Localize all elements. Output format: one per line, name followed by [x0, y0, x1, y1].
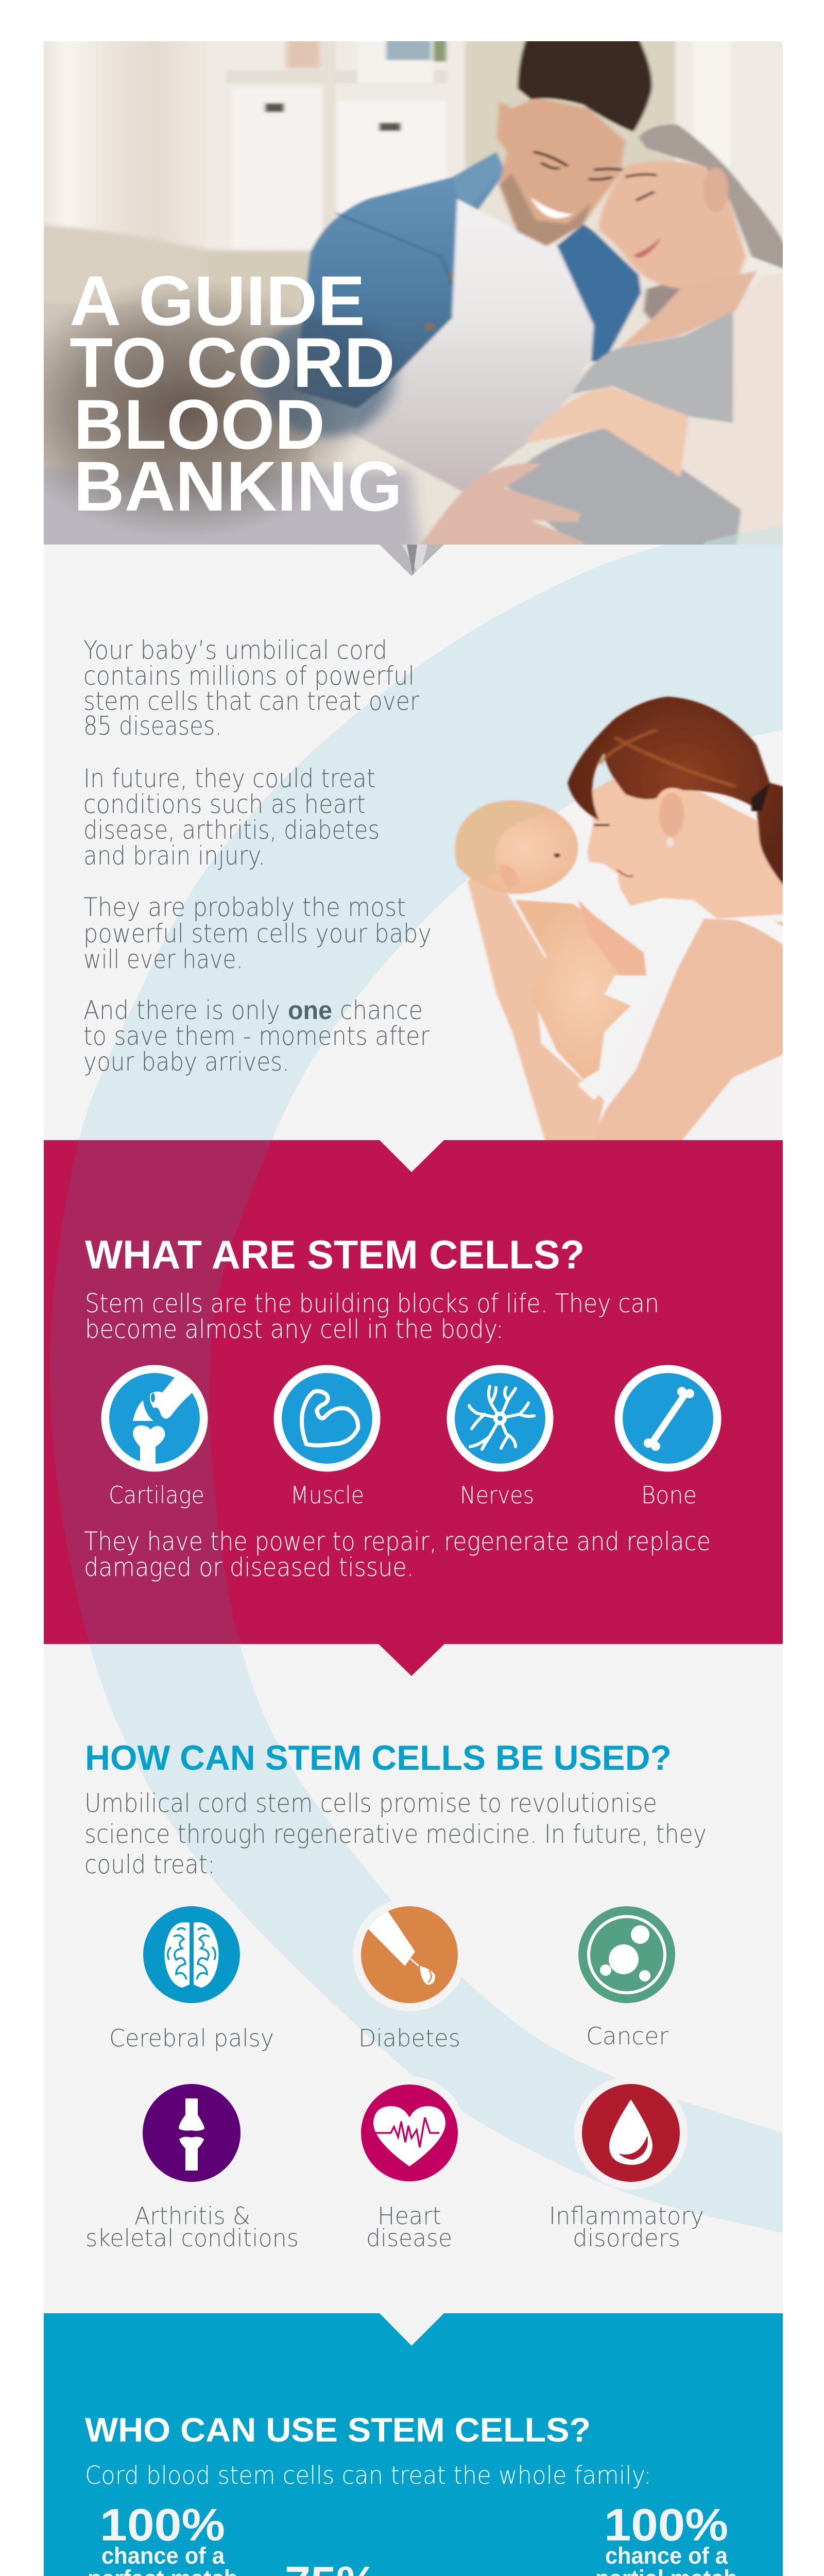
- condition labels: [85, 2022, 704, 2252]
- text: whole family: Cord blood stem cells can treat the whole family:: [85, 2461, 651, 2490]
- text: revolutionise: could treat:: [84, 1850, 215, 1879]
- icon: muscle: [274, 1365, 380, 1471]
- icon labels: [109, 1481, 697, 1509]
- notch into who section: [380, 2313, 444, 2346]
- intro text: disease, arthritis, diabetes: [83, 815, 380, 845]
- intro text: powerful stem cells your baby: [83, 919, 432, 948]
- intro text: stem cells that can treat over: [83, 686, 419, 716]
- condition labels: skeletal conditions: [85, 2224, 299, 2252]
- title: BLOOD: [74, 385, 325, 464]
- intro text: In future, they could treat: [83, 764, 375, 793]
- bar chart: match chances: 100%: [604, 2499, 728, 2550]
- intro text: 85 diseases.: [83, 711, 222, 741]
- intro text: to save them - moments after: [83, 1021, 430, 1051]
- text: revolutionise: [84, 1788, 707, 1879]
- intro text: [83, 635, 432, 1077]
- icon: diabetes pen: [353, 1898, 466, 2011]
- intro text: chance: [340, 995, 423, 1025]
- icon: blood drop: [574, 2076, 688, 2190]
- panel: how can stem cells be used background: [44, 1644, 783, 2313]
- icon: arthritis joint: [135, 2076, 248, 2190]
- heading: who can use stem cells: WHO CAN USE STEM CELLS?: [85, 2411, 591, 2449]
- title: A GUIDE: [70, 262, 365, 341]
- intro text: one: [288, 996, 332, 1025]
- bar chart: match chances: 100%: [100, 2499, 225, 2550]
- intro text: contains millions of powerful: [83, 661, 415, 691]
- condition labels: Cerebral palsy: [109, 2024, 274, 2052]
- condition labels: Diabetes: [358, 2024, 460, 2052]
- icon: brain: [135, 1898, 248, 2011]
- panel: intro background: [44, 545, 783, 1140]
- condition labels: disorders: [573, 2224, 680, 2252]
- text: building blocks: become almost any cell in the body:: [85, 1314, 504, 1344]
- intro text: Your baby’s umbilical cord: [83, 635, 387, 665]
- heading: what are stem cells: WHAT ARE STEM CELLS?: [85, 1232, 585, 1277]
- intro text: And there is only: [83, 995, 280, 1025]
- title: TO CORD: [70, 324, 395, 402]
- panel: who can use stem cells background: [44, 2313, 783, 2576]
- hero notch showing photo: [380, 545, 444, 576]
- heading: how can stem cells be used: HOW CAN STEM CELLS BE USED?: [85, 1738, 672, 1777]
- text: revolutionise: science through regenerative medicine. In future, they: [84, 1819, 707, 1849]
- icon: bone: [615, 1365, 721, 1471]
- intro text: conditions such as heart: [83, 789, 366, 819]
- photo: mother holding baby: [455, 697, 799, 1145]
- bar chart: match chances: [88, 2499, 743, 2576]
- intro text: will ever have.: [83, 944, 243, 974]
- text: building blocks: Stem cells are the building blocks of life. They can: [85, 1289, 659, 1318]
- text: building blocks: [85, 1289, 659, 1344]
- text: power to repair: [84, 1527, 711, 1582]
- icon: cancer cell: [570, 1898, 683, 2011]
- text: revolutionise: Umbilical cord stem cells promise to revolutionise: [84, 1788, 657, 1818]
- bar chart: match chances: chance of a: [101, 2543, 225, 2569]
- title: [70, 262, 402, 526]
- condition labels: Heart: [377, 2202, 441, 2230]
- panel: what are stem cells background: [44, 1140, 783, 1644]
- intro text: They are probably the most: [83, 892, 406, 922]
- icon: heart: [353, 2076, 466, 2190]
- text: power to repair: damaged or diseased tissue.: [84, 1552, 414, 1582]
- intro text: your baby arrives.: [83, 1047, 289, 1077]
- notch into what are stem cells panel: [380, 1140, 444, 1172]
- decorative arc band: [50, 515, 783, 2233]
- bar chart: match chances: chance of a: [605, 2543, 728, 2569]
- icon labels: Muscle: [290, 1481, 364, 1509]
- condition labels: Cancer: [586, 2022, 668, 2050]
- icon: cartilage: [101, 1365, 208, 1471]
- hero photo: expectant couple: [44, 41, 783, 545]
- condition labels: disease: [366, 2224, 452, 2252]
- icon labels: Cartilage: [109, 1481, 204, 1509]
- text: power to repair: They have the power to repair, regenerate and replace: [84, 1527, 711, 1556]
- icon labels: Nerves: [460, 1481, 534, 1509]
- condition labels: Arthritis &: [134, 2202, 250, 2230]
- notch into how section: [379, 1644, 444, 1676]
- condition labels: Inflammatory: [549, 2202, 704, 2230]
- intro text: and brain injury.: [83, 841, 265, 871]
- title: BANKING: [74, 447, 402, 526]
- icon: nerves: [447, 1365, 553, 1471]
- icon labels: Bone: [641, 1481, 697, 1509]
